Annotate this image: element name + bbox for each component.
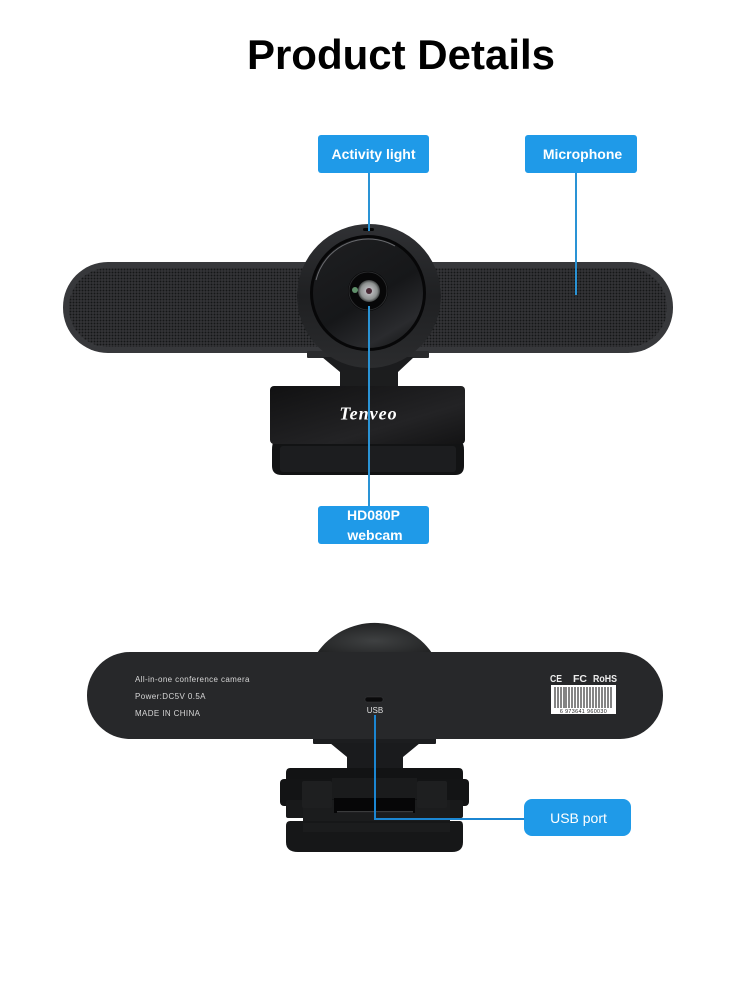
rear printed specs: All-in-one conference camera [135, 675, 250, 684]
barcode [551, 685, 616, 715]
neck and stand [307, 351, 429, 386]
rear bar [87, 652, 663, 739]
rear printed specs: Power:DC5V 0.5A [135, 692, 206, 701]
usb socket [365, 697, 383, 715]
front view webcam [63, 224, 673, 475]
rear printed specs [135, 675, 250, 718]
callout: activity light [318, 135, 429, 231]
certification marks: CE [550, 674, 562, 685]
barcode: 6 973641 960030 [560, 709, 607, 715]
camera housing [297, 224, 441, 368]
speaker bar [63, 262, 673, 353]
clip foot [286, 821, 463, 852]
rear printed specs: MADE IN CHINA [135, 709, 201, 718]
certification marks: FC [573, 674, 587, 685]
brand logo: Tenveo [339, 404, 398, 424]
neck and clip [280, 737, 469, 852]
certification marks: RoHS [593, 674, 617, 685]
lens [348, 271, 388, 311]
usb socket: USB [367, 706, 383, 715]
callout: webcam: webcam [346, 527, 403, 543]
callout: activity light: Activity light [331, 146, 416, 162]
hinge block [280, 779, 469, 806]
callout: microphone: Microphone [543, 146, 622, 162]
rear view webcam [87, 623, 663, 852]
callout: usb port [375, 715, 631, 836]
callout: webcam: HD080P [347, 507, 400, 523]
activity light [363, 228, 374, 231]
callout: webcam [318, 306, 429, 544]
title: Product Details [247, 31, 555, 78]
certification marks [550, 674, 617, 685]
callout: usb port: USB port [550, 810, 607, 826]
rear dome [317, 623, 432, 653]
clip top [286, 768, 463, 782]
callout: microphone [525, 135, 637, 295]
clip body [270, 386, 465, 475]
